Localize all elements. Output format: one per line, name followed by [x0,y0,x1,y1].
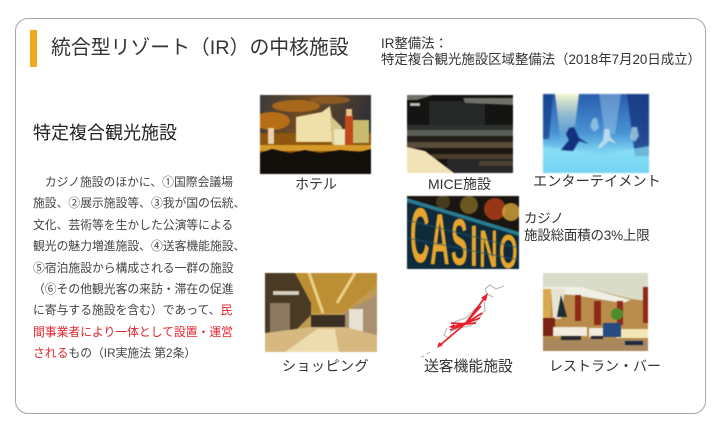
label: casino with floor area limit: カジノ [524,211,564,226]
text block: definition: に寄与する施設を含む）であって、民 [33,303,232,317]
text block: definition: 文化、芸術等を生かした公演等による [33,218,233,232]
text block: definition [33,175,245,360]
label: MICE facility: MICE施設 [428,176,491,192]
photo: hotel [259,94,372,175]
label: casino with floor area limit [524,211,650,243]
label: casino with floor area limit: 施設総面積の3%上限 [524,228,650,243]
photo: restaurant and bar [542,272,649,352]
text block: definition: カジノ施設のほかに、①国際会議場 [45,175,233,189]
text block: definition: ⑤宿泊施設から構成される一群の施設 [33,261,234,275]
label: restaurant and bar: レストラン・バー [549,358,661,374]
text block: definition: 観光の魅力増進施設、④送客機能施設、 [33,239,245,253]
photo: casino sign [406,195,520,270]
text block: definition: （⑥その他観光客の来訪・滞在の促進 [33,282,234,296]
text block: IR law name: 特定複合観光施設区域整備法（2018年7月20日成立） [381,52,701,67]
label: entertainment: エンターテイメント [533,174,661,190]
text block: definition: 施設、②展示施設等、③我が国の伝統、 [33,196,245,210]
photo: MICE hall [406,94,514,174]
icon: orange title accent bar [30,30,37,67]
text block: IR law name: IR整備法： [381,36,448,51]
text block: definition: されるもの（IR実施法 第2条） [33,346,196,360]
label: hotel: ホテル [295,176,337,192]
label: shopping: ショッピング [282,358,369,374]
label: transport facility: 送客機能施設 [424,359,513,375]
photo: shopping arcade [264,272,378,353]
icon: map of Japan with red transport arrows [420,284,504,358]
title: 統合型リゾート（IR）の中核施設 [51,37,349,59]
photo: entertainment [542,93,650,174]
text block: IR law name [381,36,701,67]
text block: definition: 間事業者により一体として設置・運営 [33,325,233,339]
heading: specified complex tourism facility: 特定複合観光施設 [33,123,177,143]
